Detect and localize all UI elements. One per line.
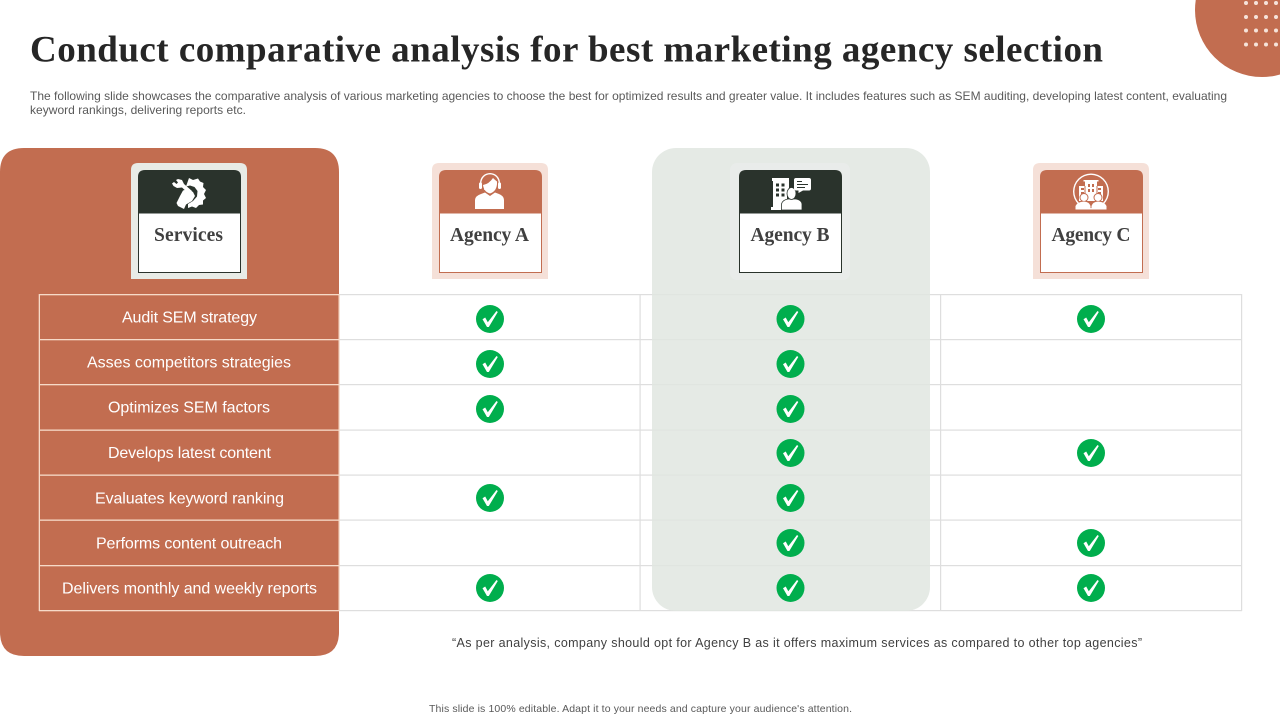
check marks: Agency C <box>1077 305 1105 602</box>
check marks: Agency A <box>476 305 504 602</box>
check marks: Agency B <box>776 305 804 602</box>
card: Agency C: Agency C <box>1052 225 1130 246</box>
title: Conduct comparative analysis for best marketing agency selection <box>30 30 1103 70</box>
icon: support agent with headset <box>475 173 504 209</box>
service row labels: Optimizes SEM factors <box>108 400 270 416</box>
description text: keyword rankings, delivering reports etc. <box>30 103 246 117</box>
service row labels: Asses competitors strategies <box>87 354 291 372</box>
card: Agency A: Agency A <box>450 225 529 246</box>
icon: office building and person with speech bubble <box>771 178 811 210</box>
conclusion quote: “As per analysis, company should opt for Agency B as it offers maximum services as compared to other top agencies” <box>452 636 1142 650</box>
icon: wrench and gear <box>172 178 206 209</box>
comparison table grid <box>339 294 1242 611</box>
description text <box>30 89 1227 117</box>
service row labels <box>62 310 317 598</box>
service row labels: Develops latest content <box>108 445 272 462</box>
service row labels: Delivers monthly and weekly reports <box>62 580 317 598</box>
card: Services: Services <box>154 225 223 246</box>
card: Agency B <box>730 163 850 280</box>
panel: services column background <box>0 148 339 656</box>
service row labels: Audit SEM strategy <box>122 310 257 326</box>
card: Agency B: Agency B <box>750 225 830 246</box>
footer note: This slide is 100% editable. Adapt it to your needs and capture your audience's attention. <box>429 703 852 715</box>
service row labels: Performs content outreach <box>96 536 282 552</box>
card: Agency C <box>1033 163 1149 279</box>
panel: Agency B highlight <box>652 148 930 611</box>
decorative corner circle <box>1195 0 1280 77</box>
card: Agency A <box>432 163 548 279</box>
description text: The following slide showcases the comparative analysis of various marketing agencies to choose the best for optimized results and greater value. It includes features such as SEM auditing, developing latest content, evaluating <box>30 89 1227 103</box>
service row labels: Evaluates keyword ranking <box>95 490 284 508</box>
card: Services <box>131 163 247 279</box>
icon: buildings and people in circle <box>1073 174 1109 210</box>
service rows grid <box>39 294 340 611</box>
